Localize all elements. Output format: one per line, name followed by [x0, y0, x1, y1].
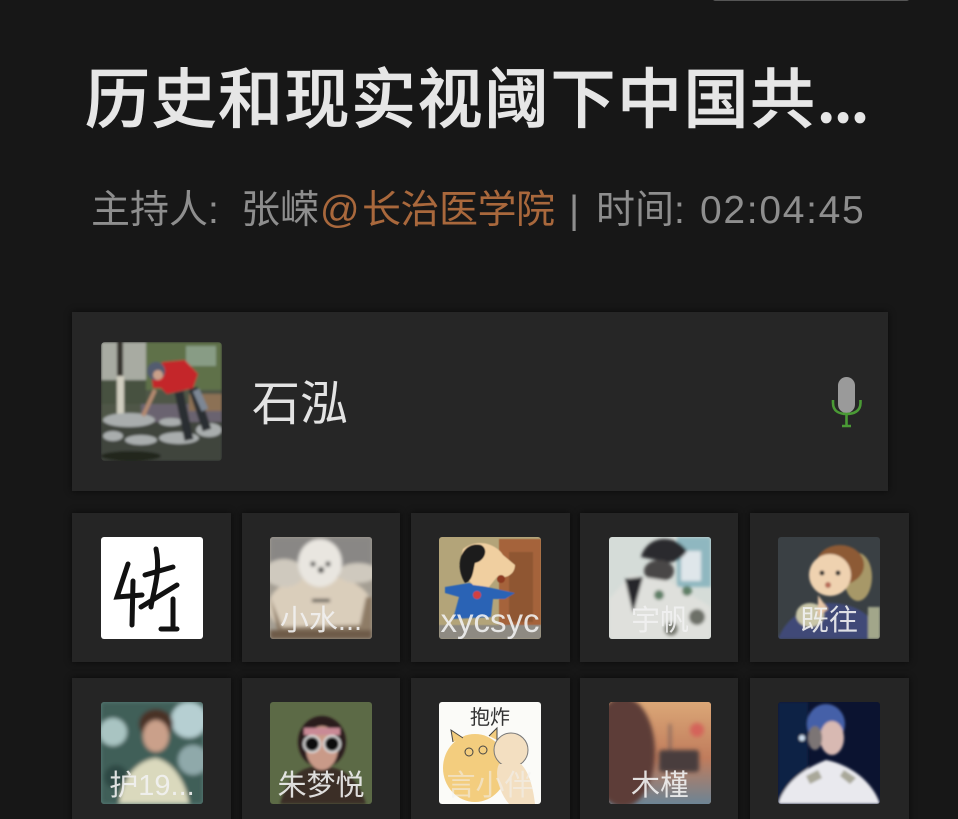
avatar: woman outdoors — [101, 702, 203, 804]
icon: microphone — [832, 377, 862, 428]
avatar: person with bouquet — [609, 537, 711, 639]
host and time line: | — [569, 189, 579, 232]
name label: 木槿 — [631, 770, 689, 802]
title: 历史和现实视阈下中国共... — [85, 47, 867, 141]
name label: xycsyc — [440, 602, 540, 639]
host and time line: 时间: — [596, 189, 685, 232]
panel: active speaker — [72, 312, 888, 491]
name label: 言小伴 — [446, 770, 534, 802]
host and time line — [91, 189, 865, 232]
panel: participant 4 — [580, 513, 738, 662]
name label: 宇帆 — [631, 605, 689, 637]
top button edge — [712, 0, 910, 1]
name label: 小水... — [280, 605, 362, 637]
avatar: cartoon boy — [439, 537, 541, 639]
avatar: performer on stage — [778, 702, 880, 804]
panel: participant 2 — [242, 513, 400, 662]
panel: participant 1 — [72, 513, 231, 662]
host and time line: 02:04:45 — [700, 189, 865, 232]
host and time line: 长治医学院 — [362, 189, 555, 232]
avatar: person with sunglasses — [270, 702, 372, 804]
avatar: cartoon cat meme: 抱炸 — [470, 706, 510, 729]
panel: participant 7 — [242, 678, 400, 819]
panel: participant 10 — [750, 678, 909, 819]
name label: 朱梦悦 — [277, 770, 364, 802]
panel: participant 9 — [580, 678, 738, 819]
host and time line: 张嵘 — [241, 189, 319, 232]
avatar: painted girl — [778, 537, 880, 639]
panel: participant 8 — [411, 678, 570, 819]
avatar: calligraphy — [101, 537, 203, 639]
avatar: cartoon cat meme — [439, 702, 541, 804]
panel: participant 3 — [411, 513, 570, 662]
host and time line: @ — [320, 189, 360, 232]
name label: 护19... — [109, 770, 195, 802]
speaker name: 石泓 — [252, 378, 348, 431]
speaker avatar: cyclist — [101, 342, 222, 461]
host and time line: 主持人: — [91, 189, 219, 232]
name label: 既往 — [800, 605, 858, 637]
panel: participant 6 — [72, 678, 231, 819]
avatar: white dog — [270, 537, 372, 639]
avatar: sunset phone photo — [609, 702, 711, 804]
panel: participant 5 — [750, 513, 909, 662]
